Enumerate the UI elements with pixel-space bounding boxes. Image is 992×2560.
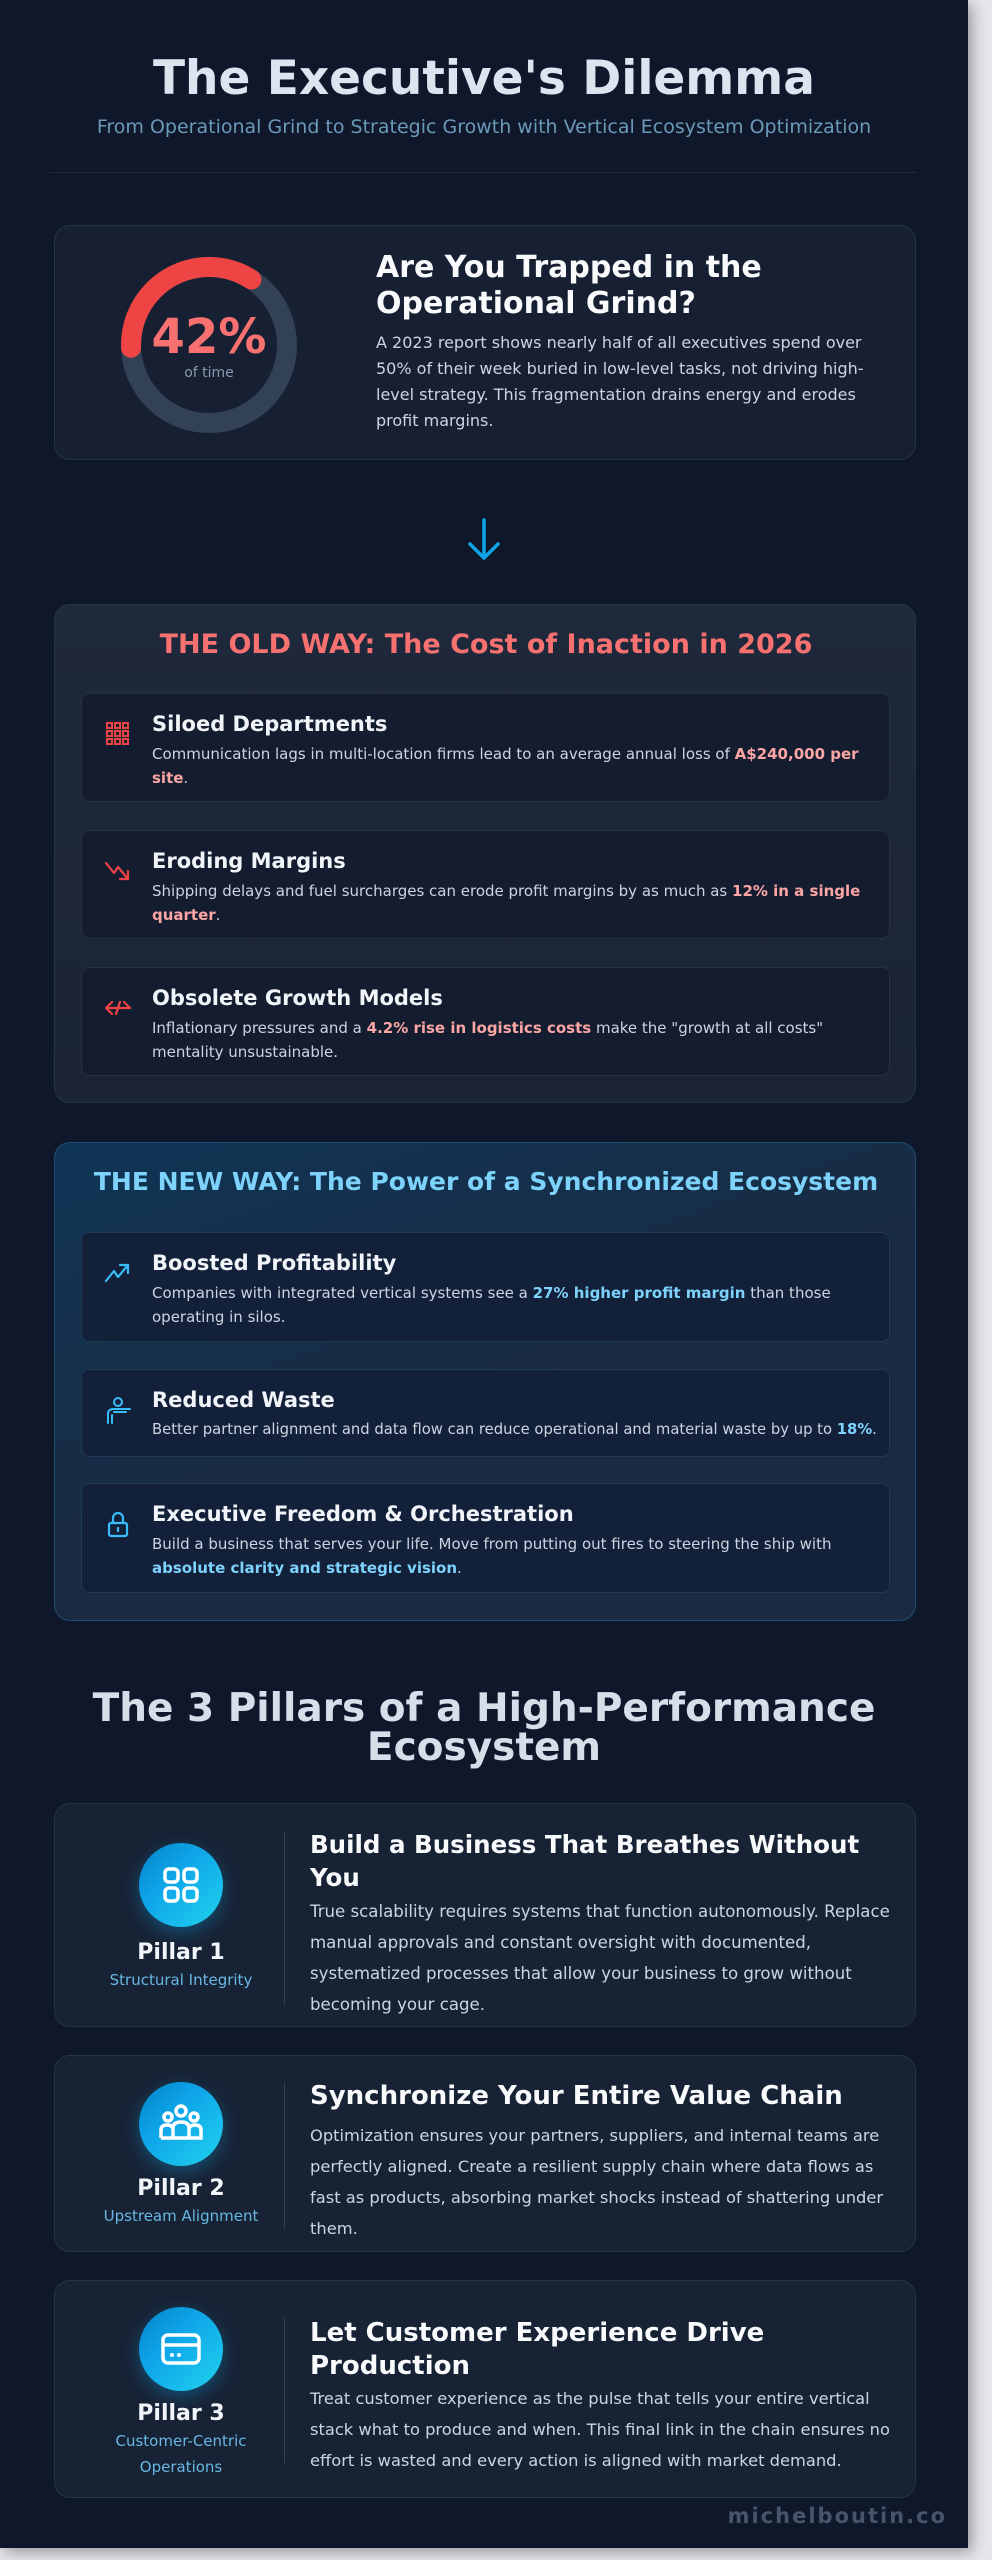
panel: pillar 1: True scalability requires systems that function autonomously. Replace manual approvals and constant oversight with documented, systematized processes that allow your business to grow without becoming your cage. [310, 1902, 890, 2014]
item: reduced waste: Better partner alignment and data flow can reduce operational and material waste by up to 18%. [152, 1421, 877, 1438]
panel: pillar 3: Pillar 3 [137, 2401, 225, 2426]
panel: pillar 2: Upstream Alignment [104, 2207, 258, 2225]
panel: pillar 2: Synchronize Your Entire Value Chain [310, 2081, 843, 2111]
item: siloed departments: Siloed Departments [152, 712, 387, 736]
item: boosted profitability: Companies with integrated vertical systems see a 27% higher profit margin than those operating in silos. [152, 1284, 831, 1326]
icon: lock [108, 1512, 128, 1538]
icon: arrows [104, 1000, 132, 1016]
icon: grid circle [139, 1843, 223, 1927]
donut chart: 42% [121, 257, 297, 433]
footer: brand: michelboutin.co [728, 2504, 947, 2528]
panel: pillar 3: Operations [140, 2458, 222, 2476]
heading: THE OLD WAY: The Cost of Inaction in 2026 [160, 629, 812, 660]
panel: pillar 3 [54, 2280, 916, 2498]
panel: pillar 3: Customer-Centric [116, 2432, 246, 2450]
panel: pillar 3: Let Customer Experience Drive Production [310, 2318, 764, 2381]
item: siloed departments [81, 693, 890, 802]
donut chart: 42%: of time [184, 365, 234, 381]
heading: Are You Trapped in the Operational Grind? [376, 250, 762, 321]
item: executive freedom: Build a business that serves your life. Move from putting out fires to steering the ship with absolute clarity and strategic vision. [152, 1535, 831, 1577]
item: obsolete growth: Inflationary pressures and a 4.2% rise in logistics costs make the "growth at all costs" mentality unsustainable. [152, 1019, 823, 1061]
item: siloed departments: Communication lags in multi-location firms lead to an average annual loss of A$240,000 per site. [152, 745, 859, 787]
panel: pillar 2 [54, 2055, 916, 2252]
item: reduced waste: Reduced Waste [152, 1388, 335, 1412]
panel: new way [54, 1142, 916, 1621]
panel: pillar 2: Pillar 2 [137, 2176, 225, 2201]
panel: pillar 1: Build a Business That Breathes Without You [310, 1830, 859, 1892]
donut chart: 42%: 42% [152, 309, 266, 365]
icon: team circle [139, 2082, 223, 2166]
title: The Executive's Dilemma [153, 51, 815, 106]
arrow: down [468, 518, 500, 560]
item: obsolete growth: Obsolete Growth Models [152, 986, 443, 1010]
panel: pillar 1: Structural Integrity [110, 1971, 252, 1989]
panel: operational grind [54, 225, 916, 460]
item: boosted profitability [81, 1232, 890, 1342]
heading: pillars: The 3 Pillars of a High-Performance Ecosystem [93, 1686, 875, 1770]
panel: pillar 3: Treat customer experience as the pulse that tells your entire vertical stack what to produce and when. This final link in the chain ensures no effort is wasted and every action is aligned with market demand. [310, 2389, 890, 2470]
icon: trend down [104, 862, 130, 880]
text block: A 2023 report shows nearly half of all executives spend over 50% of their week buried in low-level tasks, not driving high-level strategy. This fragmentation drains energy and erodes profit margins. [376, 333, 864, 430]
heading: THE NEW WAY: The Power of a Synchronized Ecosystem [94, 1167, 878, 1196]
item: eroding margins [81, 830, 890, 939]
item: executive freedom [81, 1483, 890, 1593]
icon: trend up [104, 1264, 130, 1282]
item: eroding margins: Eroding Margins [152, 849, 346, 873]
subtitle: From Operational Grind to Strategic Growth with Vertical Ecosystem Optimization [97, 116, 871, 138]
panel: pillar 2: Optimization ensures your partners, suppliers, and internal teams are perfectly aligned. Create a resilient supply chain where data flows as fast as products, absorbing market shocks instead of shattering under them. [310, 2126, 883, 2238]
panel: old way [54, 604, 916, 1103]
item: eroding margins: Shipping delays and fuel surcharges can erode profit margins by as much as 12% in a single quarter. [152, 882, 860, 924]
item: obsolete growth [81, 967, 890, 1076]
panel: pillar 1 [54, 1803, 916, 2027]
item: executive freedom: Executive Freedom & Orchestration [152, 1502, 574, 1526]
icon: grid [106, 722, 129, 745]
item: reduced waste [81, 1369, 890, 1457]
icon: card circle [139, 2307, 223, 2391]
item: boosted profitability: Boosted Profitability [152, 1251, 396, 1275]
icon: person [107, 1397, 131, 1424]
panel: pillar 1: Pillar 1 [137, 1940, 225, 1965]
